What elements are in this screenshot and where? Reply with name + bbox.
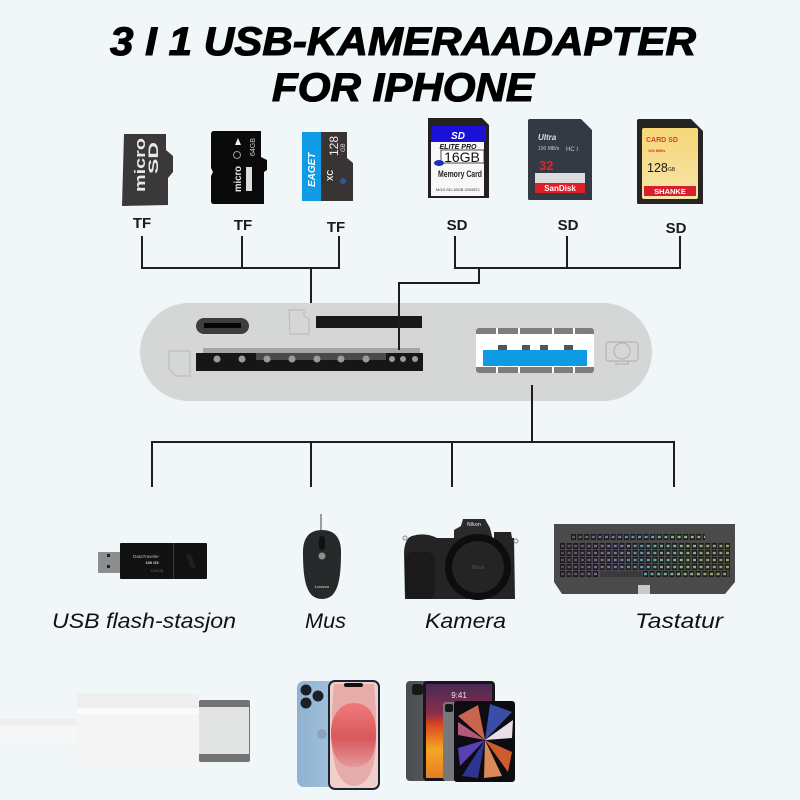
device labels: Tastatur xyxy=(635,610,724,633)
icon: camera outline xyxy=(606,342,638,364)
icon: microSD card 3: 128 xyxy=(327,136,341,156)
icon: iPhones xyxy=(297,680,380,790)
icon: iPads xyxy=(406,681,515,782)
icon: microSD card 2 xyxy=(211,131,267,204)
card type labels: TF xyxy=(327,219,345,236)
card type labels: SD xyxy=(558,217,579,234)
icon: SD card 128GB Shanke: 100 MB/s xyxy=(648,148,666,153)
icon: SD card 32GB SanDisk: HC I xyxy=(566,147,578,153)
icon: USB flash drive: 100 G3 xyxy=(145,560,159,565)
icon: microSD card 1: micro xyxy=(132,138,149,192)
icon: SD outline xyxy=(169,351,190,376)
icon: SD card 128GB Shanke xyxy=(637,119,703,204)
icon: SD card 16GB xyxy=(428,118,489,198)
icon: microSD card 2: 64GB xyxy=(250,138,257,156)
icon: SD card 32GB SanDisk: SanDisk xyxy=(544,184,576,193)
card type labels xyxy=(133,215,687,237)
icon: microSD card 3 xyxy=(302,132,353,201)
icon: SD card 16GB: M/10-SD-16GB 2009871 xyxy=(436,187,481,192)
icon: SD card 32GB SanDisk xyxy=(528,119,592,200)
device labels: Kamera xyxy=(425,610,506,633)
device labels: Mus xyxy=(305,610,347,633)
icon: camera xyxy=(403,519,518,600)
card type labels: TF xyxy=(234,217,252,234)
icon: microSD card 3: EAGET xyxy=(307,152,318,187)
connector lines: USB devices xyxy=(152,385,674,487)
icon: camera: Nikon xyxy=(472,565,485,571)
icon: SD card 128GB Shanke: 128 xyxy=(647,161,668,175)
icon: SD card 16GB: SD xyxy=(451,131,465,142)
icon: SD card 128GB Shanke: SHANKE xyxy=(654,187,686,196)
icon: SD card 32GB SanDisk: 100 MB/s xyxy=(538,146,560,152)
icon: USB-C plug and cable xyxy=(0,694,250,767)
card type labels: TF xyxy=(133,215,151,232)
icon: SD card 16GB: ELITE PRO xyxy=(440,144,477,151)
card type labels: SD xyxy=(447,217,468,234)
title xyxy=(110,20,696,110)
adapter body xyxy=(140,303,652,401)
icon: USB flash drive: 128GB xyxy=(151,568,164,573)
icon: SD card 16GB: 16GB xyxy=(444,149,480,165)
icon: mouse xyxy=(303,514,341,599)
port: USB-C xyxy=(196,318,249,334)
connector lines: TF xyxy=(142,236,339,303)
port: USB-A xyxy=(476,328,594,373)
icon: microSD outline xyxy=(289,310,309,334)
icon: microSD card 3: XC xyxy=(326,170,335,181)
icon: USB flash drive: DataTraveler xyxy=(133,554,159,559)
device labels: USB flash-stasjon xyxy=(52,610,236,633)
icon: SD card 32GB SanDisk: Ultra xyxy=(538,133,557,142)
device labels xyxy=(52,610,724,633)
connector lines: SD xyxy=(399,236,680,350)
port: TF slot xyxy=(316,316,422,328)
title: 3 I 1 USB-KAMERAADAPTER xyxy=(110,20,696,64)
icon: microSD card 3: GB xyxy=(341,143,347,152)
icon: microSD card 1 xyxy=(122,134,173,206)
icon: microSD card 1: SD xyxy=(145,142,161,174)
icon: SD card 128GB Shanke: CARD SD xyxy=(646,137,678,144)
icon: mouse: Lenovo xyxy=(315,584,330,589)
icon: camera: Nikon xyxy=(467,522,481,528)
icon: keyboard xyxy=(554,524,735,594)
icon: SD card 32GB SanDisk: 32 xyxy=(539,158,553,173)
port: SD slot xyxy=(196,348,423,371)
icon: SD card 128GB Shanke: GB xyxy=(668,167,676,173)
icon: microSD card 2: micro xyxy=(233,166,244,192)
card type labels: SD xyxy=(666,220,687,237)
title: FOR IPHONE xyxy=(272,66,535,110)
icon: USB flash drive xyxy=(98,543,207,579)
icon: SD card 16GB: Memory Card xyxy=(438,169,482,179)
icon: iPads: 9:41 xyxy=(451,691,467,700)
